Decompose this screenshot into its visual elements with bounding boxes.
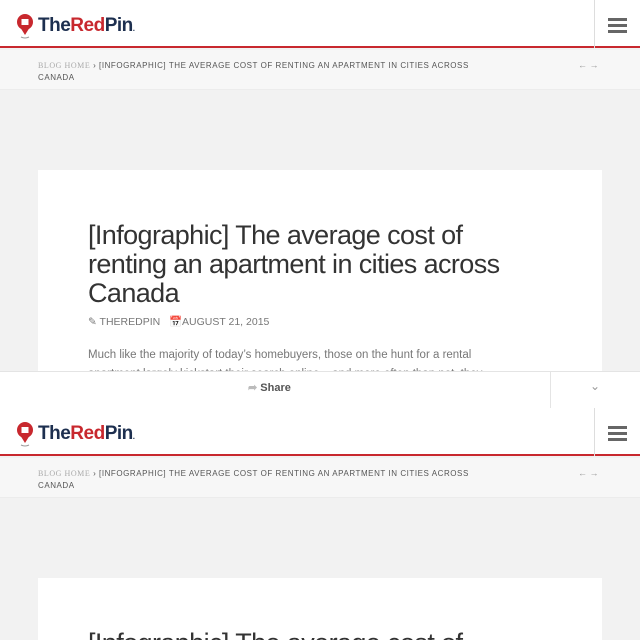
page copy 2 [0, 408, 640, 640]
paragraph: Much like the majority of today’s homebuyers, those on the hunt for a rental apartment largely kickstart their search online – and more often than not, they [88, 349, 482, 380]
page copy 1 [0, 0, 640, 408]
header [0, 408, 640, 456]
breadcrumb: BLOG HOME › [INFOGRAPHIC] THE AVERAGE COST OF RENTING AN APARTMENT IN CITIES ACROSS CANADA [38, 61, 469, 82]
meta: ✎ THEREDPIN 📅AUGUST 21, 2015 [88, 316, 269, 328]
share bar [0, 371, 640, 408]
breadcrumb [0, 50, 640, 90]
breadcrumb: ← → [578, 468, 599, 478]
article card [38, 578, 602, 640]
breadcrumb [0, 458, 640, 498]
logo: TheRedPin. [38, 15, 134, 36]
article card [38, 170, 602, 470]
breadcrumb: ← → [578, 60, 599, 70]
logo: TheRedPin. [38, 423, 134, 444]
share bar: ➦ Share [248, 382, 291, 394]
share bar: ⌄ [590, 379, 600, 393]
breadcrumb: BLOG HOME › [INFOGRAPHIC] THE AVERAGE COST OF RENTING AN APARTMENT IN CITIES ACROSS CANADA [38, 469, 469, 490]
icon: menu [594, 0, 640, 48]
header [0, 0, 640, 48]
icon: menu [594, 408, 640, 456]
title: [Infographic] The average cost of renting an apartment in cities across Canada [88, 220, 500, 308]
